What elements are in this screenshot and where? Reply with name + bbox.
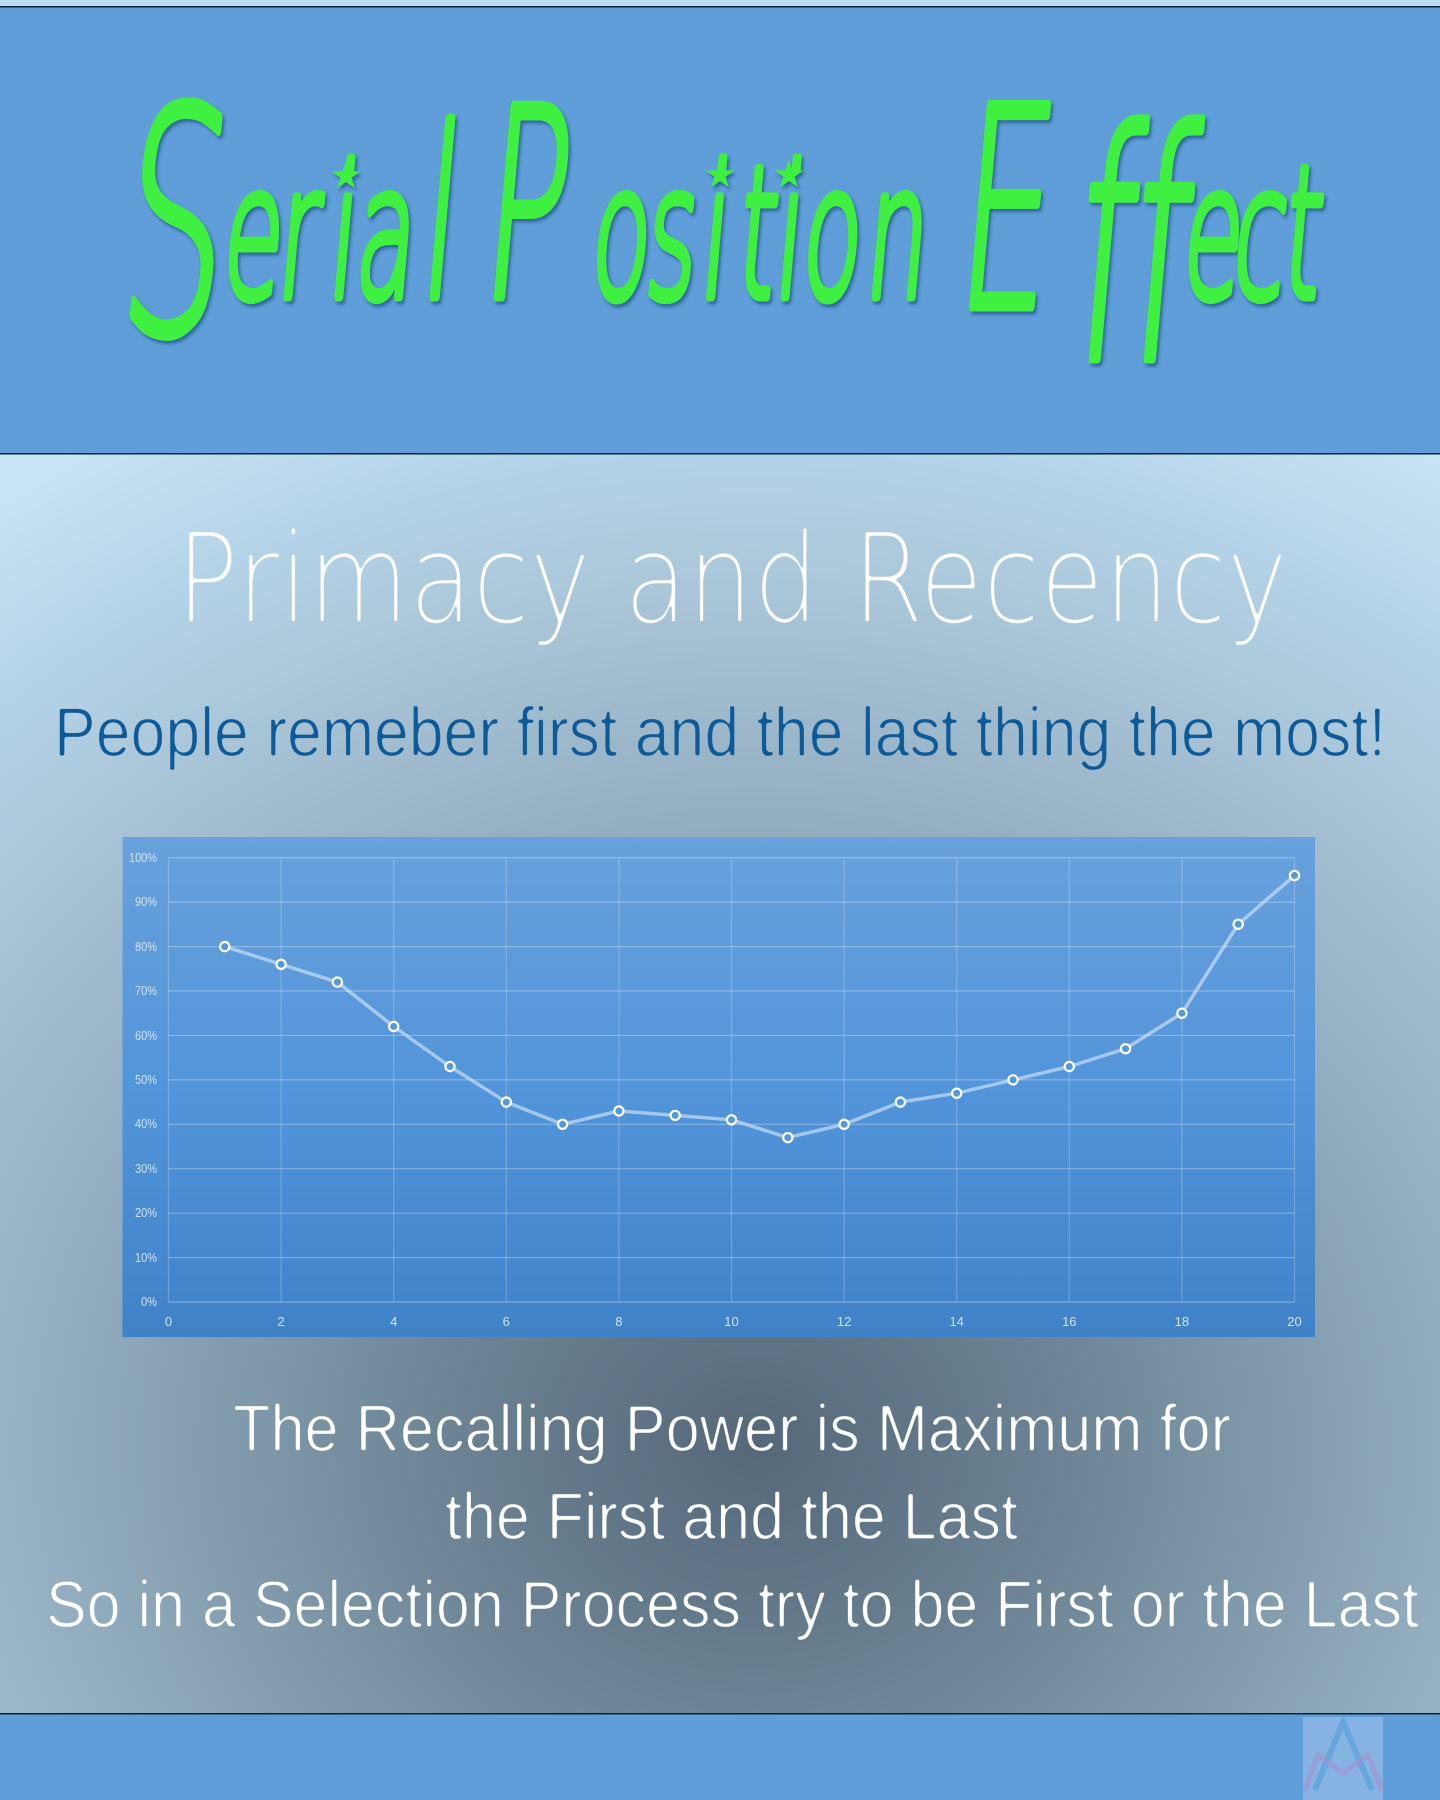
x axis labels: 4 (390, 1314, 397, 1329)
x axis labels: 8 (615, 1314, 623, 1329)
x axis labels: 0 (165, 1314, 172, 1329)
y axis labels: 30% (135, 1161, 157, 1176)
y axis labels: 80% (135, 939, 157, 954)
data markers (220, 871, 1299, 1142)
y axis labels: 20% (135, 1205, 157, 1220)
title: l (413, 81, 471, 353)
title: ect (1176, 128, 1332, 341)
y axis labels: 90% (135, 894, 157, 909)
y axis labels: 70% (135, 983, 157, 998)
title (107, 46, 1340, 434)
icon: logo: 30 (1335, 1747, 1351, 1763)
y axis labels: 60% (135, 1028, 157, 1043)
title: E (948, 51, 1068, 373)
y axis labels (129, 850, 157, 1309)
title: eria (216, 128, 426, 341)
conclusion text: the First and the Last (445, 1479, 1018, 1553)
x axis labels: 12 (837, 1314, 851, 1329)
x axis labels: 10 (724, 1314, 739, 1329)
line chart (122, 837, 1315, 1337)
x axis labels: 20 (1287, 1314, 1302, 1329)
y axis labels: 40% (135, 1116, 157, 1131)
data line (225, 876, 1294, 1138)
title: P (474, 53, 583, 360)
conclusion text (46, 1391, 1419, 1641)
title: S (110, 46, 243, 406)
y axis labels: 100% (129, 850, 157, 865)
y axis labels: 50% (135, 1072, 157, 1087)
x axis labels: 6 (503, 1314, 510, 1329)
x axis labels: 18 (1175, 1314, 1189, 1329)
title: ff (1063, 66, 1208, 434)
conclusion text: The Recalling Power is Maximum for (233, 1391, 1231, 1465)
y axis labels: 0% (141, 1294, 157, 1309)
y axis labels: 10% (135, 1250, 157, 1265)
x axis labels (165, 1314, 1302, 1329)
footer band (0, 1713, 1440, 1800)
x axis labels: 16 (1062, 1314, 1077, 1329)
title: osition (584, 128, 938, 341)
header band (0, 0, 1440, 454)
icon: logo (1303, 1717, 1383, 1800)
x axis labels: 14 (949, 1314, 964, 1329)
x axis labels: 2 (277, 1314, 285, 1329)
